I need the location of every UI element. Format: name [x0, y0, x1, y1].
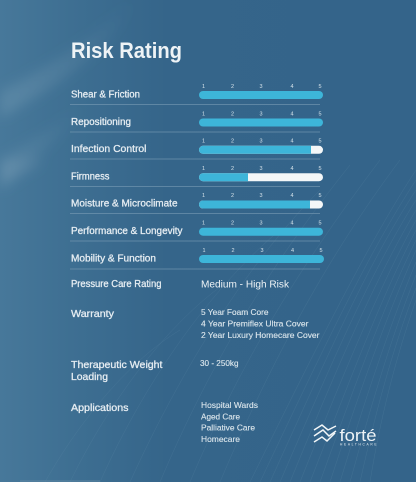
row: Firmness: 2	[231, 166, 234, 172]
row dividers	[70, 104, 320, 269]
pressure care rating: Pressure Care Rating	[71, 279, 162, 290]
applications: Aged Care	[201, 412, 241, 422]
row: Moisture & Microclimate: Moisture & Microclimate	[71, 198, 178, 210]
row: Repositioning: Repositioning	[71, 117, 131, 128]
row: Infection Control: 3	[259, 138, 263, 144]
warranty: 4 Year Premiflex Ultra Cover	[201, 320, 309, 328]
row: Performance & Longevity: 5	[318, 220, 322, 226]
row: Repositioning: 1	[202, 112, 205, 118]
row: Firmness: 4	[290, 166, 294, 172]
row: Moisture & Microclimate: 1	[202, 193, 205, 199]
row: Shear & Friction: 1	[202, 84, 205, 90]
row: Infection Control: 4	[290, 138, 294, 144]
row: Repositioning: 5	[318, 112, 322, 118]
row: Performance & Longevity: 4	[290, 220, 294, 226]
applications	[71, 401, 258, 444]
row: Mobility & Function: 2	[231, 248, 235, 254]
row: Infection Control: Infection Control	[71, 144, 146, 155]
row: Firmness	[71, 166, 323, 182]
row: Repositioning	[71, 112, 323, 128]
row: Infection Control: 2	[231, 138, 234, 144]
row: Moisture & Microclimate: 4	[290, 193, 294, 199]
therapeutic weight loading: Therapeutic Weight	[71, 360, 163, 371]
row: Mobility & Function: 5	[319, 248, 323, 254]
row: Mobility & Function	[71, 248, 324, 264]
row: Performance & Longevity: 3	[259, 220, 263, 226]
row: Repositioning: 4	[290, 112, 294, 118]
row: Performance & Longevity: 2	[231, 220, 234, 226]
row: Infection Control: 1	[202, 138, 205, 144]
pressure care rating	[71, 278, 290, 290]
icon: logo waves	[314, 425, 336, 442]
row: Mobility & Function: Mobility & Function	[71, 254, 156, 264]
warranty: Warranty	[71, 309, 115, 320]
row: Repositioning: 3	[259, 112, 263, 118]
row: Performance & Longevity: 1	[202, 220, 205, 226]
therapeutic weight loading	[71, 359, 238, 383]
row: Shear & Friction	[71, 84, 323, 100]
row: Infection Control: 5	[318, 138, 322, 144]
row: Firmness: 5	[318, 166, 322, 172]
warranty: 5 Year Foam Core	[201, 308, 269, 317]
row: Mobility & Function: 1	[202, 248, 206, 254]
row: Shear & Friction: 4	[290, 84, 294, 90]
applications: Palliative Care	[201, 424, 256, 432]
row: Firmness: Firmness	[71, 172, 110, 182]
applications: Homecare	[201, 435, 241, 444]
row: Moisture & Microclimate: 2	[231, 193, 234, 199]
row: Performance & Longevity	[71, 220, 323, 237]
background line pattern	[45, 160, 416, 482]
logo: forte healthcare: HEALTHCARE	[340, 442, 376, 446]
row: Moisture & Microclimate: 5	[318, 193, 322, 199]
warranty	[71, 308, 320, 340]
logo: forte healthcare	[314, 425, 376, 446]
row: Infection Control	[71, 138, 323, 155]
therapeutic weight loading: Loading	[71, 372, 108, 383]
row: Mobility & Function: 4	[291, 248, 294, 254]
row: Shear & Friction: 5	[318, 84, 322, 90]
logo: forte healthcare: forté	[340, 427, 376, 445]
row: Shear & Friction: 3	[259, 84, 263, 90]
row: Repositioning: 2	[231, 112, 234, 118]
row: Firmness: 1	[202, 166, 205, 172]
bottom edge strip	[20, 480, 100, 482]
applications: Hospital Wards	[201, 401, 258, 410]
row: Shear & Friction: 2	[231, 84, 234, 90]
row: Moisture & Microclimate: 3	[259, 193, 263, 199]
row: Shear & Friction: Shear & Friction	[71, 90, 140, 100]
row: Firmness: 3	[259, 166, 263, 172]
background swooshes	[0, 0, 135, 190]
therapeutic weight loading: 30 - 250kg	[200, 359, 238, 368]
row: Moisture & Microclimate	[71, 193, 323, 210]
title: Risk Rating	[71, 38, 182, 63]
pressure care rating: Medium - High Risk	[201, 278, 290, 290]
warranty: 2 Year Luxury Homecare Cover	[201, 331, 320, 340]
row: Mobility & Function: 3	[260, 248, 264, 254]
applications: Applications	[71, 403, 128, 414]
row: Performance & Longevity: Performance & Longevity	[71, 226, 183, 237]
